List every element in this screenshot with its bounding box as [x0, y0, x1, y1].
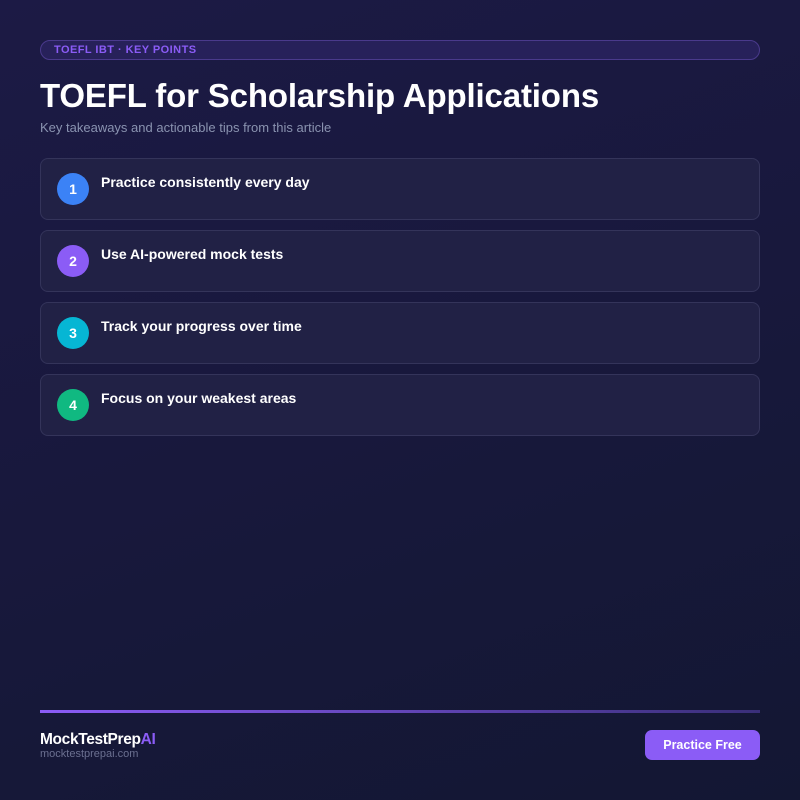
- tag pill: [40, 40, 760, 60]
- subtitle: Key takeaways and actionable tips from this article: [40, 120, 331, 135]
- title: TOEFL for Scholarship Applications: [40, 77, 599, 114]
- card 1: [40, 158, 760, 220]
- card 2: 2: [69, 253, 77, 269]
- button: [645, 730, 760, 760]
- brand: MockTestPrepAI: [40, 731, 155, 748]
- tag pill: TOEFL IBT · KEY POINTS: [54, 44, 197, 56]
- card 4: [40, 374, 760, 436]
- card 4: Focus on your weakest areas: [101, 390, 296, 406]
- button: Practice Free: [663, 738, 742, 752]
- footer line: [40, 710, 760, 713]
- card 3: 3: [69, 325, 77, 341]
- card 3: Track your progress over time: [101, 318, 302, 334]
- card 2: [40, 230, 760, 292]
- card 3: [40, 302, 760, 364]
- card 4: 4: [69, 397, 77, 413]
- card 2: Use AI-powered mock tests: [101, 246, 283, 262]
- card 1: 1: [69, 181, 77, 197]
- url: mocktestprepai.com: [40, 748, 138, 760]
- card 1: Practice consistently every day: [101, 174, 310, 190]
